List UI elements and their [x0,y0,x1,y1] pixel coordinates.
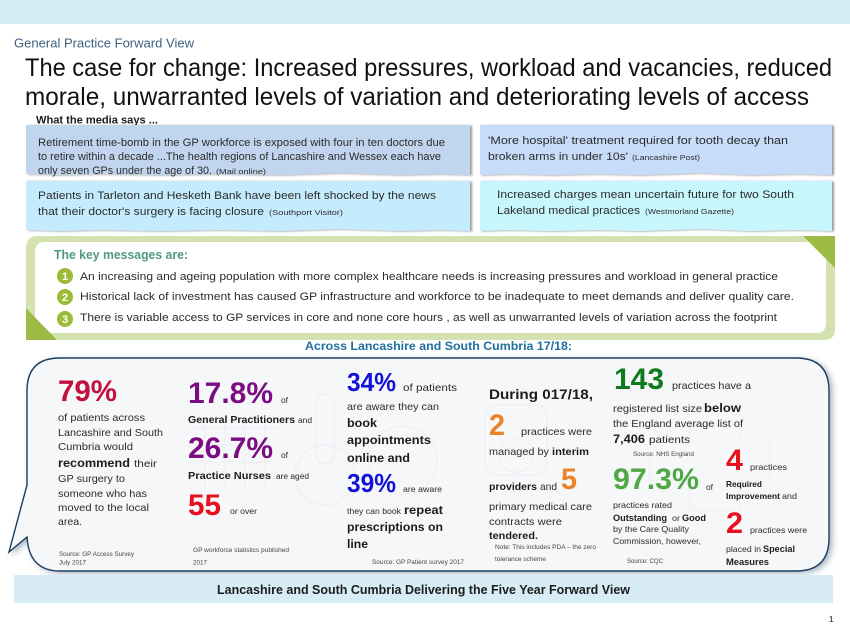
stat: interim providers and tendered contracts: managed by [489,446,550,458]
stat: workforce aged 55 or over [188,377,312,566]
stat: required improvement and special measures: 2 [726,507,743,540]
stat: interim providers and tendered contracts: During 017/18, [489,386,593,402]
panel: media quote retirement: to retire within a decade ...The health regions of Lancashire and Wessex each have [38,151,441,163]
stat: 79% recommend: their [134,458,158,470]
stat: interim providers and tendered contracts: and [540,481,557,493]
stat: online booking awareness: prescriptions on [347,520,443,534]
stat: workforce aged 55 or over: are aged [276,472,309,481]
stat: 79% recommend: Source: GP Access Survey [59,552,134,558]
panel: media quote tooth decay: (Lancashire Post) [632,153,701,162]
stat: required improvement and special measures [726,444,807,568]
stat: interim providers and tendered contracts: contracts were [489,516,562,528]
panel: media quote retirement: Retirement time-bomb in the GP workforce is exposed with four in ten doctors due [38,137,445,149]
stat: workforce aged 55 or over: 55 [188,489,221,522]
panel: media quote surgery closure: (Southport Visitor) [269,208,344,217]
stat: 143 practices below average list: the England average list of [613,418,743,430]
panel: media quote retirement [26,125,470,177]
stat: 97.3% rated outstanding or good: or [672,513,680,523]
stat: 79% recommend: Lancashire and South [58,427,163,439]
stat: 97.3% rated outstanding or good: Good [682,513,706,524]
heading: what the media says: What the media says ... [36,114,158,126]
panel: media quote surgery closure [26,181,470,231]
stat: workforce aged 55 or over: of [281,451,289,460]
stat: 97.3% rated outstanding or good [613,463,714,565]
panel: media quote tooth decay: broken arms in under 10s' [488,151,628,163]
stat: 97.3% rated outstanding or good: of [706,483,714,492]
title: morale, unwarranted levels of variation and deteriorating levels of access [25,83,809,111]
stat: workforce aged 55 or over: 26.7% [188,432,273,465]
stat: workforce aged 55 or over: and [298,416,312,425]
stat: online booking awareness: are aware [403,485,443,494]
stat: online booking awareness: online and [347,451,410,465]
panel: media quote tooth decay [480,125,832,175]
stat: 143 practices below average list: 143 [614,363,664,396]
stat: 79% recommend: recommend [58,456,130,470]
message 2: Historical lack of investment has caused GP infrastructure and workforce to be inadequate to meet demands and deliver quality care. [80,291,794,303]
panel: media quote increased charges: Lakeland medical practices [497,205,641,217]
panel: media quote increased charges [480,181,832,231]
message 2: 2 [62,292,68,304]
stat: 97.3% rated outstanding or good: Commission, however, [613,536,701,546]
stat: required improvement and special measures: practices were [750,525,807,535]
title [25,54,832,111]
message 1 [57,268,778,284]
panel: key messages [26,236,835,340]
stat: online booking awareness: repeat [404,503,443,517]
stat: 79% recommend [58,375,163,566]
stat: 79% recommend: someone who has [58,488,147,500]
stat: online booking awareness: 34% [347,367,396,397]
stat: interim providers and tendered contracts: 2 [489,409,505,442]
stat: interim providers and tendered contracts: tendered. [489,530,538,542]
stat: interim providers and tendered contracts: primary medical care [489,501,592,513]
panel: media quote surgery closure: Patients in Tarleton and Hesketh Bank have been left shocked by the news [38,190,437,202]
stat: 79% recommend: GP surgery to [58,473,125,485]
panel: media quote increased charges: Increased charges mean uncertain future for two South [497,189,794,201]
page number: 1 [829,615,834,624]
icons: faint background pictograms [190,394,770,510]
section label: General Practice Forward View [14,36,195,50]
message 3: 3 [62,314,68,326]
stat: 143 practices below average list: practices have a [672,380,751,392]
stat: required improvement and special measures: Special [763,544,795,555]
stat: required improvement and special measures: Measures [726,557,769,568]
stat: 143 practices below average list: Source: NHS England [633,452,694,458]
stat: workforce aged 55 or over: Practice Nurses [188,471,271,482]
top banner [0,0,850,24]
stat: required improvement and special measures: practices [750,462,787,472]
stat: online booking awareness: appointments [347,433,431,447]
stat: interim providers and tendered contracts: practices were [521,426,592,438]
stat: required improvement and special measures: Improvement [726,491,780,501]
stat: online booking awareness: are aware they can [347,401,439,413]
panel: media quote surgery closure: that their doctor's surgery is facing closure [38,206,264,218]
stat: online booking awareness: of patients [403,382,457,394]
stat: 143 practices below average list: 7,406 [613,434,645,446]
stat: required improvement and special measures: 4 [726,444,743,477]
stat: interim providers and tendered contracts: tolerance scheme [495,557,547,563]
stat: workforce aged 55 or over: 2017 [193,560,208,566]
stat: interim providers and tendered contracts [489,386,597,563]
stat: 97.3% rated outstanding or good: by the Care Quality [613,524,690,534]
message 1: An increasing and ageing population with more complex healthcare needs is increasing pressures and workload in general practice [80,271,778,283]
message 1: 1 [62,271,68,283]
stat: 79% recommend: July 2017 [59,560,87,566]
subheading: across Lancashire: Across Lancashire and South Cumbria 17/18: [305,339,572,353]
message 3: There is variable access to GP services in core and none core hours , as well as unwarranted levels of variation across the footprint [80,312,777,324]
stat: workforce aged 55 or over: or over [230,507,257,516]
stat: workforce aged 55 or over: GP workforce statistics published [193,548,289,554]
stat: online booking awareness: line [347,537,368,551]
stat: 97.3% rated outstanding or good: practices rated [613,500,672,510]
stat: online booking awareness: they can book [347,507,402,516]
stat: 97.3% rated outstanding or good: 97.3% [613,463,699,496]
stat: interim providers and tendered contracts: 5 [561,463,577,496]
stat: interim providers and tendered contracts: interim [552,446,589,458]
stat: online booking awareness: Source: GP Patient survey 2017 [372,560,465,566]
stat: required improvement and special measures: Required [726,479,762,489]
key messages heading: The key messages are: [54,248,188,262]
stat: required improvement and special measures: and [782,491,797,501]
stat: workforce aged 55 or over: General Practitioners [188,415,295,426]
stat: workforce aged 55 or over: of [281,396,289,405]
stat: online booking awareness [347,367,465,566]
stat: 143 practices below average list: patients [649,434,690,446]
stat: 97.3% rated outstanding or good: Outstanding [613,513,667,524]
stat: interim providers and tendered contracts: Note: This includes PDA – the zero [495,545,597,551]
footer banner: Lancashire and South Cumbria Delivering the Five Year Forward View [217,583,630,597]
panel: media quote tooth decay: 'More hospital' treatment required for tooth decay than [488,135,788,147]
stat: 143 practices below average list: below [704,401,742,415]
panel: speech bubble [9,358,829,571]
stat: 143 practices below average list: registered list size [613,403,702,415]
message 2 [57,289,794,305]
stat: 79% recommend: of patients across [58,412,145,424]
stat: 79% recommend: moved to the local [58,502,149,514]
stat: 79% recommend: 79% [58,375,117,408]
stat: online booking awareness: book [347,416,377,430]
stat: workforce aged 55 or over: 17.8% [188,377,273,410]
stat: required improvement and special measures: placed in [726,544,761,554]
stat: interim providers and tendered contracts: providers [489,481,537,493]
stat: 79% recommend: Cumbria would [58,441,133,453]
footer banner [14,575,833,603]
message 3 [57,311,777,327]
panel: media quote retirement: only seven GPs under the age of 30. [38,165,212,177]
stat: 143 practices below average list [613,363,751,458]
stat: online booking awareness: 39% [347,468,396,498]
stat: 97.3% rated outstanding or good: Source: CQC [627,559,664,565]
panel: media quote increased charges: (Westmorland Gazette) [645,207,735,216]
panel: media quote retirement: (Mail online) [216,167,267,176]
stat: 79% recommend: area. [58,516,82,528]
